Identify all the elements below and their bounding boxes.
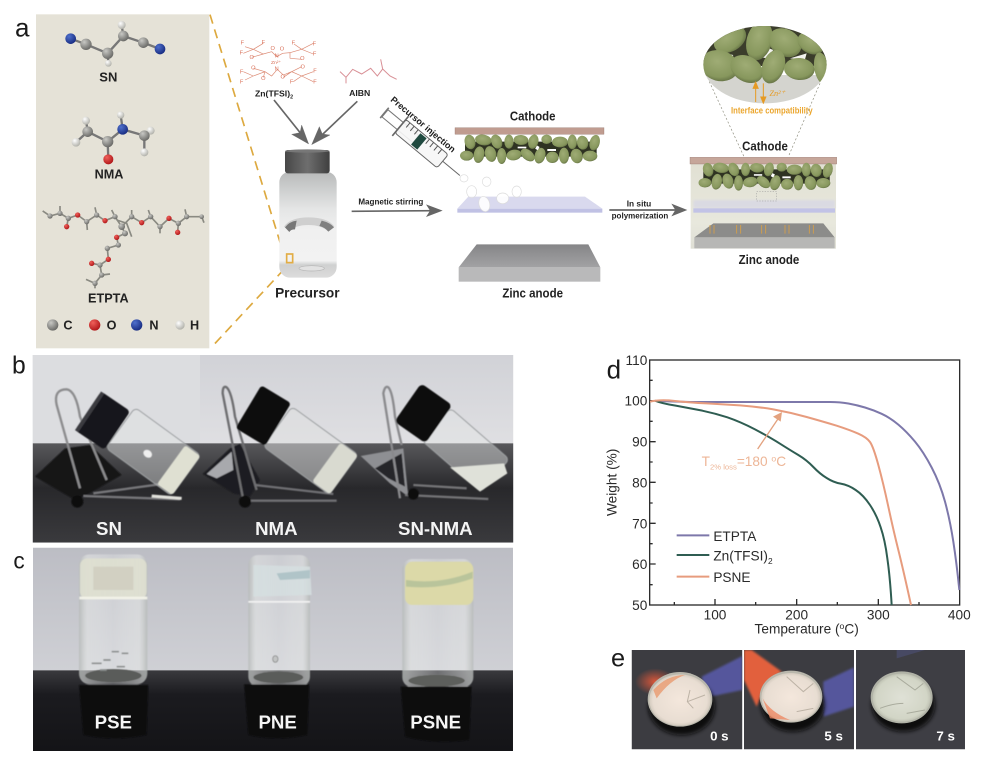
plot frame and ticks	[650, 360, 960, 605]
label in situ polymerization	[612, 199, 668, 220]
atom legend: C	[63, 319, 72, 333]
x axis tick labels: 200	[785, 607, 808, 622]
labels b: NMA	[255, 518, 298, 539]
Zn(TFSI)2 structure: F	[313, 79, 317, 85]
syringe	[376, 103, 468, 185]
curve ETPTA	[657, 401, 959, 590]
electrolyte layer	[457, 197, 602, 213]
Zn(TFSI)2 structure: F	[313, 69, 317, 75]
Zn(TFSI)2 structure: O	[300, 64, 305, 70]
x axis tick labels	[704, 607, 971, 622]
y axis tick labels: 110	[626, 353, 648, 368]
assembled cell	[690, 157, 837, 249]
annotation text: o	[771, 453, 776, 463]
atom legend: N	[149, 319, 158, 333]
labels b	[96, 522, 472, 535]
atom legend: O	[107, 319, 117, 333]
Zn(TFSI)2 structure: N	[275, 67, 279, 73]
arrow magnetic stirring	[352, 204, 443, 217]
y axis tick labels: 60	[632, 557, 648, 572]
annotation text: 2% loss	[710, 462, 737, 471]
arrow in situ polymerization	[609, 204, 687, 216]
zoom guide lines	[709, 82, 820, 157]
label Precursor: Precursor	[275, 285, 340, 300]
vial PSE	[79, 554, 148, 738]
label Cathode assembled: Cathode	[742, 140, 788, 154]
y axis tick labels: 100	[625, 394, 648, 409]
annotation text: T	[702, 454, 710, 469]
x axis title: C)	[844, 622, 859, 637]
annotation text: C	[776, 454, 786, 469]
photo 0 s: 0 s	[710, 729, 729, 744]
cathode collector	[455, 128, 604, 134]
labels b: SN	[96, 518, 122, 539]
x axis tick labels: 300	[867, 607, 890, 622]
photo 5 s	[744, 650, 854, 749]
bottle	[279, 149, 337, 278]
annotation text: =180	[737, 454, 771, 469]
legend: ETPTA	[713, 529, 757, 544]
photo 5 s: 5 s	[824, 729, 843, 744]
legend: PSNE	[713, 570, 751, 585]
label Cathode: Cathode	[510, 110, 555, 124]
Zn(TFSI)2 structure: F	[292, 41, 296, 47]
vial PNE	[244, 555, 312, 738]
label in situ polymerization: polymerization	[612, 210, 668, 220]
magnified interface	[703, 26, 827, 116]
Zn(TFSI)2 structure: F	[262, 40, 266, 46]
panel label a: a	[15, 13, 30, 43]
x axis tick labels: 400	[948, 607, 971, 622]
panel b: tilted vial photo	[12, 352, 513, 543]
Zn(TFSI)2 structure: O	[249, 55, 254, 61]
label Precursor injection: Precursor injection	[389, 95, 457, 154]
atom legend	[47, 319, 199, 333]
legend: 2	[768, 556, 773, 566]
Zn(TFSI)2 structure: F	[313, 41, 317, 47]
curve Zn(TFSI)2	[655, 401, 892, 605]
y axis tick labels: 80	[632, 475, 648, 490]
Zn(TFSI)2 structure: O	[300, 56, 305, 62]
precursor droplets	[460, 175, 521, 213]
panel e: flame test	[611, 645, 965, 749]
Zn(TFSI)2 structure: F	[241, 40, 245, 46]
labels c	[96, 716, 460, 728]
x axis tick labels: 100	[704, 607, 727, 622]
molecule SN: SN	[99, 69, 117, 84]
Zn(TFSI)2 structure: F	[313, 51, 317, 57]
label Magnetic stirring: Magnetic stirring	[358, 196, 423, 206]
vial NMA	[203, 385, 358, 508]
Zn(TFSI)2 structure: O	[261, 76, 266, 82]
Zn(TFSI)2 structure: F	[290, 79, 294, 85]
y axis tick labels	[625, 353, 648, 613]
y axis tick labels: 70	[632, 516, 648, 531]
panel label e: e	[611, 645, 625, 673]
zinc anode	[459, 244, 600, 282]
label Zinc anode: Zinc anode	[502, 286, 563, 300]
labels c: PSNE	[410, 711, 461, 732]
photo 7 s: 7 s	[936, 729, 955, 744]
vial SN-NMA	[361, 383, 509, 500]
vial PSNE	[401, 559, 473, 742]
label Zn(TFSI)2: 2	[290, 94, 293, 100]
label AIBN: AIBN	[349, 88, 370, 98]
atom legend: H	[190, 319, 199, 333]
Zn2+ arrows	[753, 81, 766, 104]
photo 7 s	[856, 650, 965, 749]
Zn(TFSI)2 structure: Zn²⁺	[271, 60, 281, 66]
labels c: PNE	[258, 711, 297, 732]
label Zn(TFSI)2: Zn(TFSI)	[255, 89, 290, 99]
panel c: inverted vial photo	[13, 547, 513, 751]
vial SN	[35, 389, 201, 508]
x axis title: Temperature (	[755, 622, 840, 637]
label Zinc anode assembled: Zinc anode	[739, 253, 799, 267]
zoom dashed lines	[210, 15, 285, 347]
zoom marker on bottle	[287, 254, 293, 263]
Zn(TFSI)2 structure: O	[251, 65, 256, 71]
panel a: battery assembly process	[340, 18, 837, 300]
molecule NMA	[72, 111, 155, 182]
molecule NMA: NMA	[95, 168, 123, 182]
molecule ETPTA	[43, 206, 204, 306]
AIBN structure	[340, 59, 397, 83]
label Interface compatibility: Interface compatibility	[731, 105, 813, 115]
Zn(TFSI)2 structure: O	[280, 47, 285, 53]
y axis tick labels: 50	[632, 598, 648, 613]
panel d: TGA chart	[604, 353, 971, 637]
panel label c: c	[13, 547, 25, 573]
panel a: molecules and precursor	[15, 13, 357, 348]
Zn(TFSI)2 structure: F	[240, 69, 244, 75]
label in situ polymerization: In situ	[627, 199, 651, 209]
Zn(TFSI)2 structure: F	[240, 79, 244, 85]
molecule ETPTA: ETPTA	[88, 292, 129, 306]
Zn(TFSI)2 structure: N	[275, 53, 279, 59]
legend	[677, 529, 773, 585]
arrow AIBN to bottle	[312, 101, 357, 145]
labels c: PSE	[95, 711, 132, 732]
Zn(TFSI)2 structure: F	[240, 51, 244, 57]
y axis title: Weight (%)	[604, 449, 619, 516]
arrow Zn(TFSI)2 to bottle	[274, 100, 309, 144]
x axis title: o	[840, 621, 845, 631]
panel label b: b	[12, 352, 26, 379]
curve PSNE	[650, 400, 911, 605]
annotation arrow	[758, 412, 782, 449]
Zn2+ label: Zn²⁺	[769, 89, 786, 98]
Zn(TFSI)2 structure: O	[280, 75, 285, 81]
Zn(TFSI)2 structure	[240, 40, 317, 85]
photo 0 s	[632, 650, 742, 749]
photo b	[33, 355, 513, 543]
cathode particles	[460, 133, 602, 165]
photo c	[33, 548, 513, 751]
panel label d: d	[607, 354, 621, 384]
legend: Zn(TFSI)	[713, 549, 768, 564]
labels b: SN-NMA	[398, 518, 473, 539]
Zn(TFSI)2 structure: O	[270, 46, 275, 52]
molecule SN	[65, 21, 165, 84]
molecule panel background	[36, 14, 209, 348]
y axis tick labels: 90	[632, 435, 648, 450]
